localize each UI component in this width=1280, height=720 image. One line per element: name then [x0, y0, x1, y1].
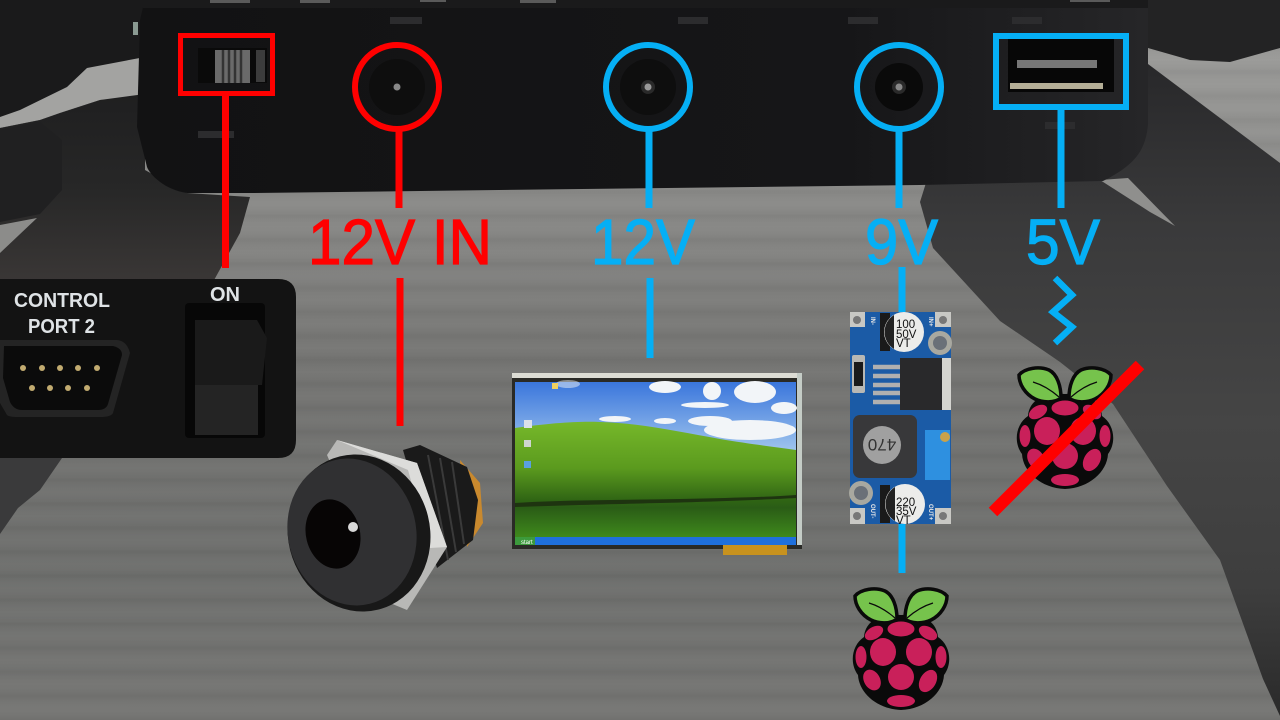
pin label: OUT-: OUT- — [869, 504, 875, 518]
connector: 12V in label to jack — [396, 278, 404, 426]
panel text: port 2: PORT 2 — [28, 315, 95, 338]
inductor 470: 470 — [868, 435, 896, 454]
blue highlight ring: 12V — [606, 45, 690, 129]
broken connector: 5V to Pi — [1053, 278, 1072, 343]
label: 9V: 9V — [865, 206, 938, 278]
start button — [515, 537, 535, 546]
label: 5V: 5V — [1026, 206, 1100, 278]
raspberry pi logo: struck out — [1017, 368, 1113, 489]
label: 12V: 12V — [591, 206, 695, 278]
red highlight ring: 12V in — [355, 45, 439, 129]
flex cable — [723, 545, 787, 555]
capacitor 100uF: 50V — [896, 329, 917, 341]
jack: 9V out — [875, 63, 923, 111]
capacitor 220uF: VT — [896, 515, 911, 527]
dark hedge line — [515, 495, 796, 507]
panel text: on: ON — [210, 283, 240, 306]
DC barrel jack photo — [271, 439, 483, 627]
capacitor 100uF: 100 — [896, 319, 915, 331]
regulator IC — [852, 355, 951, 410]
taskbar — [515, 537, 796, 545]
faint silk labels — [198, 17, 1075, 138]
red strike-through line — [993, 365, 1140, 512]
USB port — [1008, 39, 1114, 92]
trimmer — [925, 430, 950, 480]
connector: 12V ring to label — [646, 130, 652, 208]
connector: 9V ring to label — [896, 130, 902, 208]
capacitor 100uF — [880, 312, 924, 352]
capacitor 100uF: VT — [896, 338, 911, 350]
raspberry pi logo: powered — [853, 589, 949, 710]
capacitor 220uF: 35V — [896, 506, 917, 518]
connector: 12V in ring to label — [396, 130, 402, 208]
hill — [515, 422, 796, 538]
connector: 9V label to regulator — [898, 267, 906, 314]
buck converter module — [849, 312, 952, 527]
start button: start — [521, 540, 533, 546]
top edge clutter — [133, 0, 1148, 35]
blue highlight ring: 9V — [857, 45, 941, 129]
serial connector — [0, 340, 130, 417]
capacitor 220uF — [880, 484, 925, 527]
pin label: IN-: IN- — [869, 317, 875, 325]
sky — [515, 382, 796, 454]
connector: switch to rocker — [222, 95, 229, 268]
red highlight frame: switch — [180, 36, 272, 94]
panel text: control: CONTROL — [14, 289, 110, 312]
desktop icons — [552, 383, 558, 389]
connector: USB to 5V label — [1058, 107, 1064, 208]
device enclosure — [137, 7, 1148, 193]
switch on enclosure — [198, 48, 267, 83]
jack: 12V out — [620, 59, 676, 115]
LCD screen with desktop — [512, 373, 802, 555]
right glove fingers — [920, 0, 1280, 716]
label: 12V IN: 12V IN — [308, 206, 492, 278]
left glove hand — [0, 0, 250, 534]
jack: 12V in — [369, 59, 425, 115]
connector: 12V label to screen — [646, 278, 654, 358]
blue highlight frame: USB — [996, 36, 1126, 107]
connector: regulator to Pi — [898, 522, 906, 573]
pin label: IN+: IN+ — [927, 317, 933, 327]
clouds — [556, 380, 797, 440]
pin label: OUT+: OUT+ — [927, 504, 933, 521]
inductor 470 — [853, 415, 917, 478]
rocker switch — [185, 303, 267, 438]
capacitor 220uF: 220 — [896, 497, 915, 509]
rocker switch panel photo — [0, 279, 296, 458]
